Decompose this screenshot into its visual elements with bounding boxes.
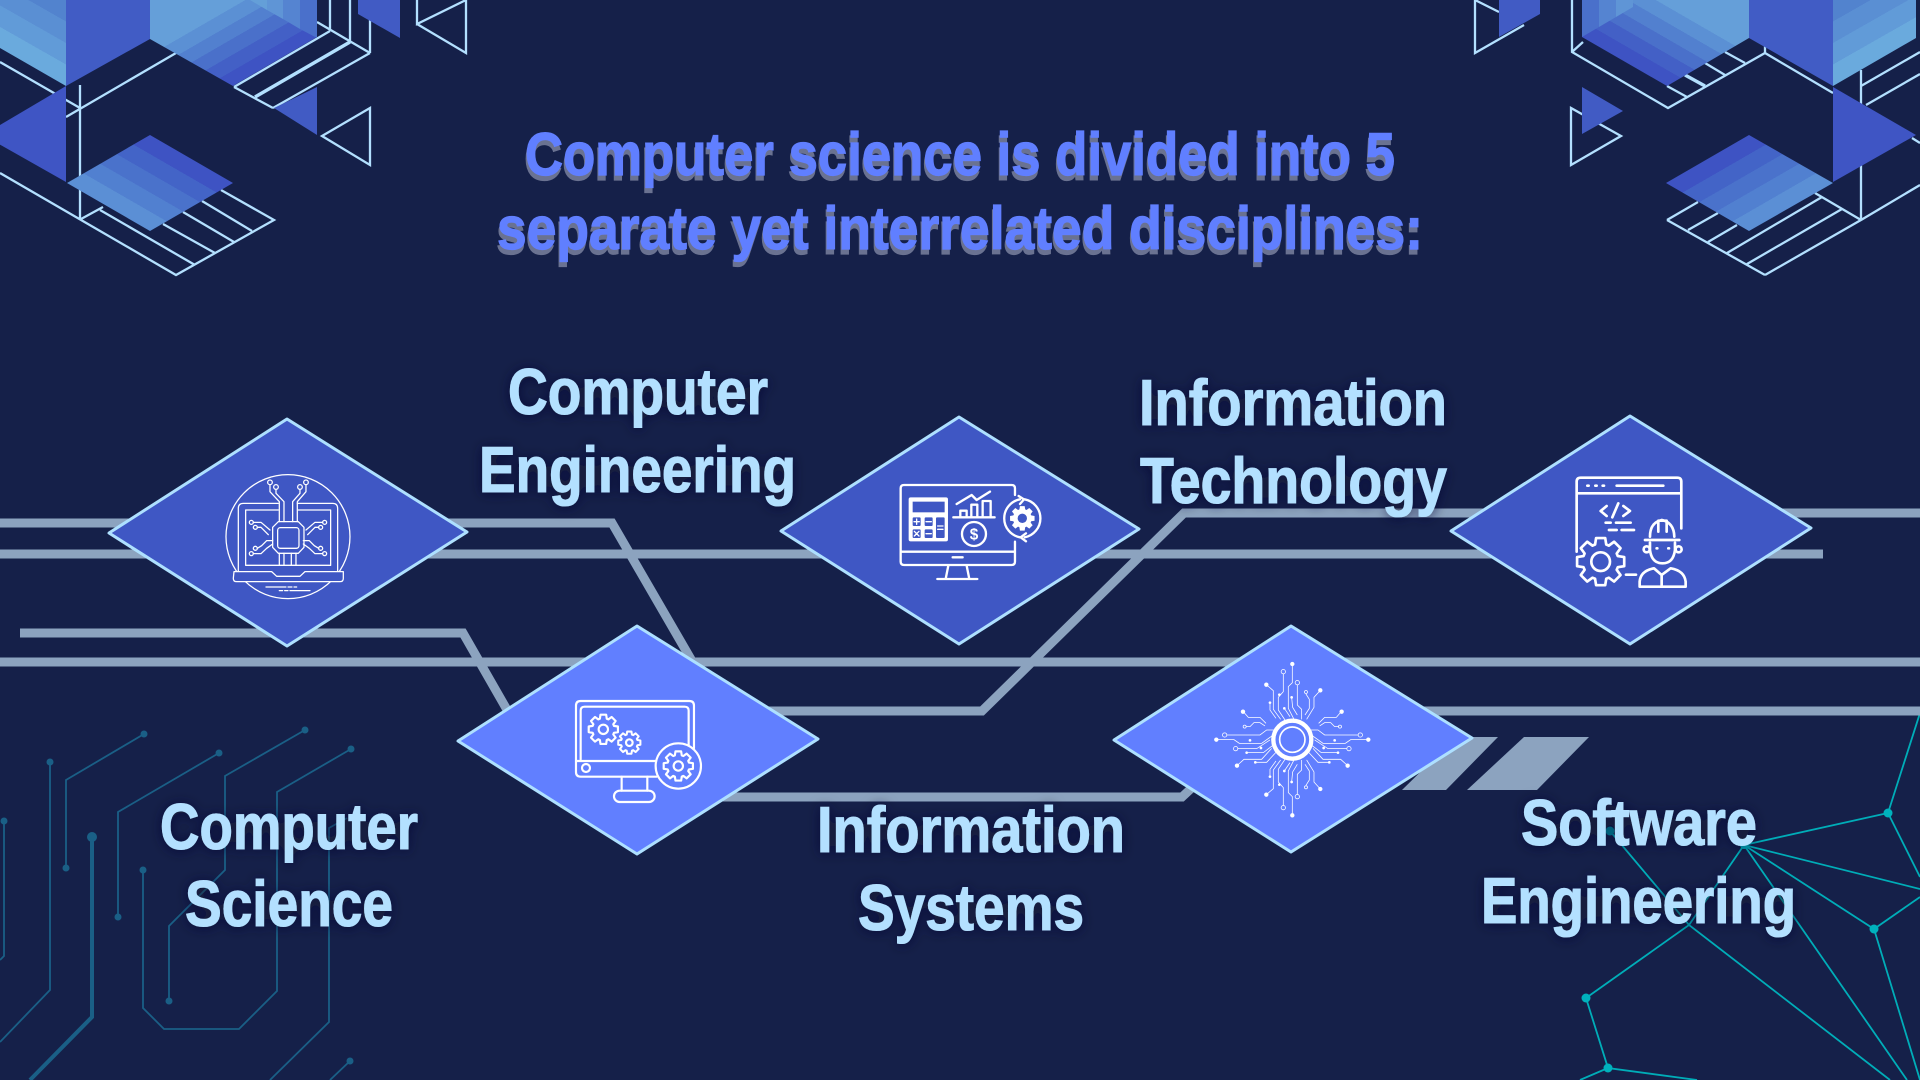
icon: laptop with chip [226, 475, 350, 599]
label: information systems [817, 793, 1125, 944]
decoration: top-right geometric cluster [1475, 0, 1920, 275]
label: information technology: Information [1139, 366, 1447, 439]
decoration: top-left geometric cluster [0, 0, 466, 275]
diamond: information systems [781, 417, 1139, 644]
label: computer science [160, 790, 418, 940]
decoration: bottom-left circuit traces [0, 726, 354, 1080]
icon: radial circuit core [1214, 662, 1370, 817]
label: software engineering: Engineering [1481, 864, 1796, 937]
icon: monitor with gears [576, 701, 701, 802]
label: software engineering [1481, 786, 1796, 937]
label: software engineering: Software [1521, 786, 1757, 859]
diamond: information technology [1114, 626, 1472, 852]
icon: monitor with calculator, chart and gear: $ [970, 526, 979, 543]
icon: code window with engineer and gear [1577, 478, 1686, 587]
label: computer engineering [479, 355, 796, 506]
connector lines [0, 513, 1920, 797]
label: computer engineering: Engineering [479, 433, 796, 506]
diamond: computer engineering [458, 626, 818, 854]
decoration: bottom-right network [1580, 713, 1920, 1080]
icon: monitor with calculator, chart and gear [901, 485, 1040, 579]
title: Computer science is divided into 5 [525, 121, 1395, 188]
label: information systems: Systems [858, 871, 1084, 944]
label: information technology: Technology [1140, 444, 1447, 517]
label: computer science: Science [185, 867, 393, 940]
diamond: computer science [109, 419, 467, 646]
label: computer engineering: Computer [508, 355, 768, 428]
parallelogram accents [1402, 737, 1589, 790]
label: information systems: Information [817, 793, 1125, 866]
title [497, 121, 1423, 262]
title: separate yet interrelated disciplines: [497, 195, 1423, 262]
label: information technology [1139, 366, 1447, 517]
label: computer science: Computer [160, 790, 418, 863]
diamond: software engineering [1451, 416, 1811, 644]
